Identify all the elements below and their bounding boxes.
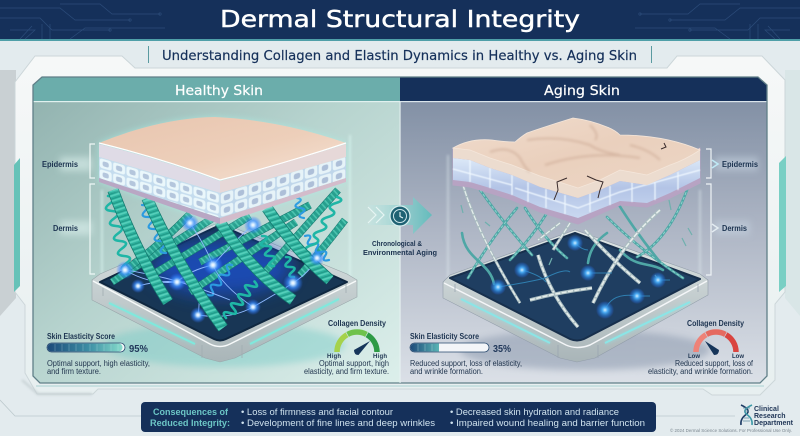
cracks: [554, 143, 666, 200]
collagen density gauge: aging: Reduced support, loss of: [675, 359, 754, 368]
consequences list left: • Development of fine lines and deep wrinkles: [241, 418, 435, 429]
copyright: © 2024 Dermal Science Solutions. For Professional Use Only.: [670, 428, 792, 433]
circuit pattern right: [635, 4, 800, 39]
collagen density gauge: aging: [648, 319, 754, 376]
collagen density gauge: healthy: High: [327, 354, 341, 360]
teal inlay left: [14, 158, 20, 292]
collagen density gauge: aging: Collagen Density: [687, 319, 744, 328]
header band: [0, 0, 800, 41]
top surface: [99, 117, 346, 180]
progress bar: [47, 343, 125, 352]
arrow caption: [363, 239, 437, 257]
collagen density gauge: aging: Low: [732, 354, 744, 360]
collagen density gauge: healthy: High: [373, 354, 387, 360]
teal strands: [462, 190, 687, 284]
arrow caption: Environmental Aging: [363, 248, 437, 257]
aging header: [400, 77, 767, 101]
consequences box: [141, 402, 656, 432]
elasticity score: aging: Skin Elasticity Score: [410, 332, 479, 341]
label: dermis aging: Dermis: [722, 224, 748, 233]
side band: [99, 144, 220, 193]
right side pale plate: [785, 70, 800, 316]
panel inner edge: [33, 77, 767, 383]
collagen density gauge: healthy: Collagen Density: [328, 319, 386, 328]
logo: clinical research department: [741, 405, 794, 427]
footer connector lines: [0, 400, 735, 416]
collagen density gauge: healthy: Optimal support, high: [319, 359, 389, 368]
consequences list left: [241, 407, 435, 429]
elasticity score: healthy: 95%: [129, 344, 148, 355]
logo: clinical research department: Research: [754, 413, 786, 420]
centre divider: [400, 102, 401, 383]
subtitle: Understanding Collagen and Elastin Dynamics in Healthy vs. Aging Skin: [162, 48, 637, 64]
elasticity score: healthy: Skin Elasticity Score: [47, 332, 115, 341]
collagen density gauge: healthy: elasticity, and firm texture.: [304, 367, 389, 376]
pale strands: [463, 185, 660, 327]
basement membrane: [453, 148, 700, 224]
consequences list left: • Loss of firmness and facial contour: [241, 407, 393, 418]
needle: [705, 341, 719, 355]
healthy heading: Healthy Skin: [175, 83, 263, 99]
blue nerve lines: [125, 223, 317, 316]
label: epidermis healthy: Epidermis: [42, 160, 79, 169]
cell layer: [453, 158, 700, 218]
needle: [354, 341, 370, 355]
panel: aging skin: [400, 77, 767, 383]
elasticity score: aging: Reduced support, loss of elasticity,: [410, 359, 522, 368]
logo: clinical research department: Department: [754, 420, 794, 427]
nerve cables: [498, 243, 670, 310]
label: epidermis healthy: [42, 144, 95, 178]
consequences list right: [450, 407, 645, 429]
dark plate: [100, 225, 347, 340]
elasticity score: aging: 35%: [493, 344, 511, 355]
cell walls: [453, 160, 700, 214]
elasticity score: healthy: Optimal support, high elasticity,: [47, 359, 150, 368]
label: dermis healthy: Dermis: [53, 224, 79, 233]
cross ropes: [112, 190, 345, 292]
elasticity score: aging: and wrinkle formation.: [410, 367, 483, 376]
main ropes: [113, 190, 330, 328]
collagen density gauge: healthy: [304, 319, 389, 376]
teal inlay right: [779, 156, 786, 292]
healthy header: [33, 77, 400, 101]
glow nodes: [116, 214, 325, 323]
platform: healthy: [92, 222, 357, 367]
collagen ropes and elastin springs: healthy: [106, 190, 345, 328]
skin block: healthy: [99, 117, 346, 224]
left side grey plate: [0, 70, 16, 316]
label: epidermis aging: Epidermis: [722, 160, 759, 169]
label: epidermis aging: [706, 149, 759, 178]
glow lines: [102, 135, 350, 280]
light strips: [461, 299, 690, 343]
label: dermis aging: [706, 184, 748, 275]
elasticity score: aging: [410, 332, 522, 376]
glow lines: [448, 155, 700, 280]
dark plate: [450, 233, 700, 340]
icon: dna helix: [741, 405, 752, 425]
consequences heading: Consequences of: [153, 407, 229, 418]
progress bar: [410, 343, 489, 352]
aging heading: Aging Skin: [544, 83, 620, 99]
circuit pattern left: [0, 4, 165, 39]
teal rim below panels: [36, 385, 764, 387]
glow nodes: [490, 235, 666, 319]
platform: aging: [443, 230, 710, 370]
broken fibres: aging: [461, 185, 692, 327]
logo: clinical research department: Clinical: [754, 406, 779, 413]
label: dermis healthy: [53, 184, 95, 274]
skin lip: [453, 148, 700, 198]
consequences list right: • Decreased skin hydration and radiance: [450, 407, 619, 418]
outer device frame: [14, 56, 786, 395]
elasticity score: healthy: and firm texture.: [47, 367, 101, 376]
consequences heading: Reduced Integrity:: [150, 418, 230, 429]
consequences list right: • Impaired wound healing and barrier function: [450, 418, 645, 429]
light strips: [109, 299, 339, 344]
icon: clock: [390, 206, 410, 226]
label glow: [60, 164, 92, 228]
cell layers: [99, 157, 220, 218]
title: Dermal Structural Integrity: [220, 7, 580, 33]
arrow caption: Chronological &: [372, 239, 422, 248]
springs front: [224, 236, 295, 318]
basement membrane: [99, 178, 220, 224]
skin block: aging: [453, 118, 700, 224]
fibre fragments: [461, 200, 692, 278]
collagen density gauge: aging: Low: [688, 354, 700, 360]
label glow: [715, 164, 758, 228]
springs back: [106, 196, 341, 300]
collagen density gauge: aging: elasticity, and wrinkle formation.: [648, 367, 753, 376]
arrow: chronological aging: [368, 197, 432, 234]
wavy top surface: [453, 118, 700, 188]
elasticity score: healthy: [47, 332, 150, 376]
surface wrinkles: [490, 125, 660, 172]
panel: healthy skin: [33, 77, 400, 383]
consequences heading: [150, 407, 230, 429]
